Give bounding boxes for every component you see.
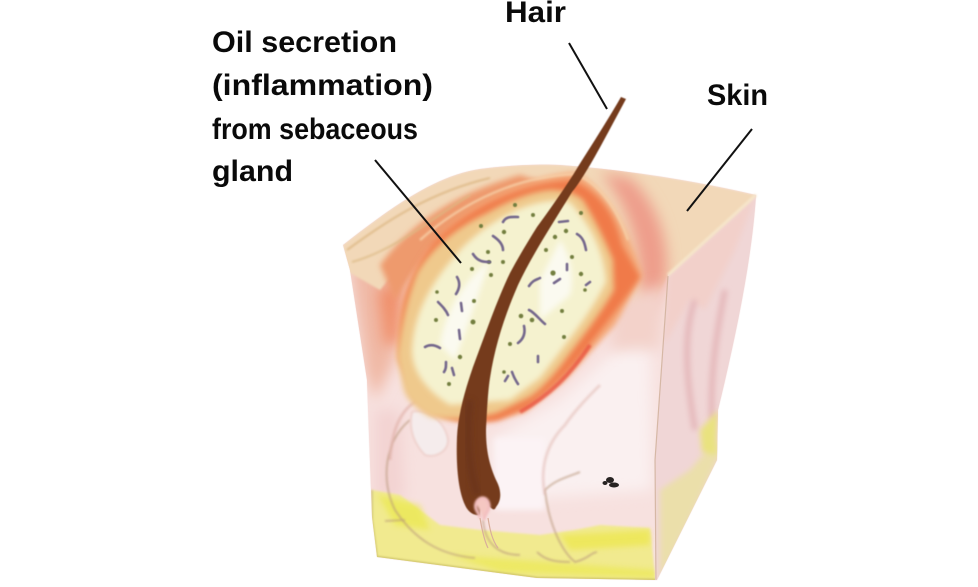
leader line: Hair <box>569 43 607 109</box>
label: Oil secretion from sebaceous gland <box>212 26 433 188</box>
skin block base <box>343 165 756 580</box>
leader line: Skin <box>687 129 752 211</box>
label: Oil secretion from sebaceous gland: from sebaceous <box>212 113 418 146</box>
right face <box>656 197 756 580</box>
red inflamed rim <box>400 180 640 422</box>
gland body <box>397 190 614 419</box>
secondary white gland <box>411 411 448 456</box>
front edge <box>655 276 668 580</box>
dark speck <box>602 477 619 488</box>
hair shaft and follicle <box>457 97 626 515</box>
hair papilla <box>476 498 489 520</box>
yellow fat layer <box>370 490 657 585</box>
label: Oil secretion from sebaceous gland: Oil secretion <box>212 26 397 59</box>
skin block illustration <box>340 97 760 585</box>
gland pale centre <box>412 201 606 405</box>
label: Oil secretion from sebaceous gland: (inflammation) <box>212 69 433 102</box>
purple bacteria <box>425 217 590 384</box>
inflammation halo <box>398 172 642 422</box>
sebaceous gland <box>397 190 614 419</box>
hair highlight <box>468 400 478 495</box>
label: Oil secretion from sebaceous gland: gland <box>212 155 293 188</box>
label: Skin: Skin <box>707 79 768 112</box>
top surface <box>343 164 754 300</box>
leader line: Oil secretion <box>375 160 461 263</box>
front tissue shading <box>343 164 755 513</box>
green sebum dots <box>434 203 587 386</box>
nerve and vessel strands <box>385 385 600 562</box>
